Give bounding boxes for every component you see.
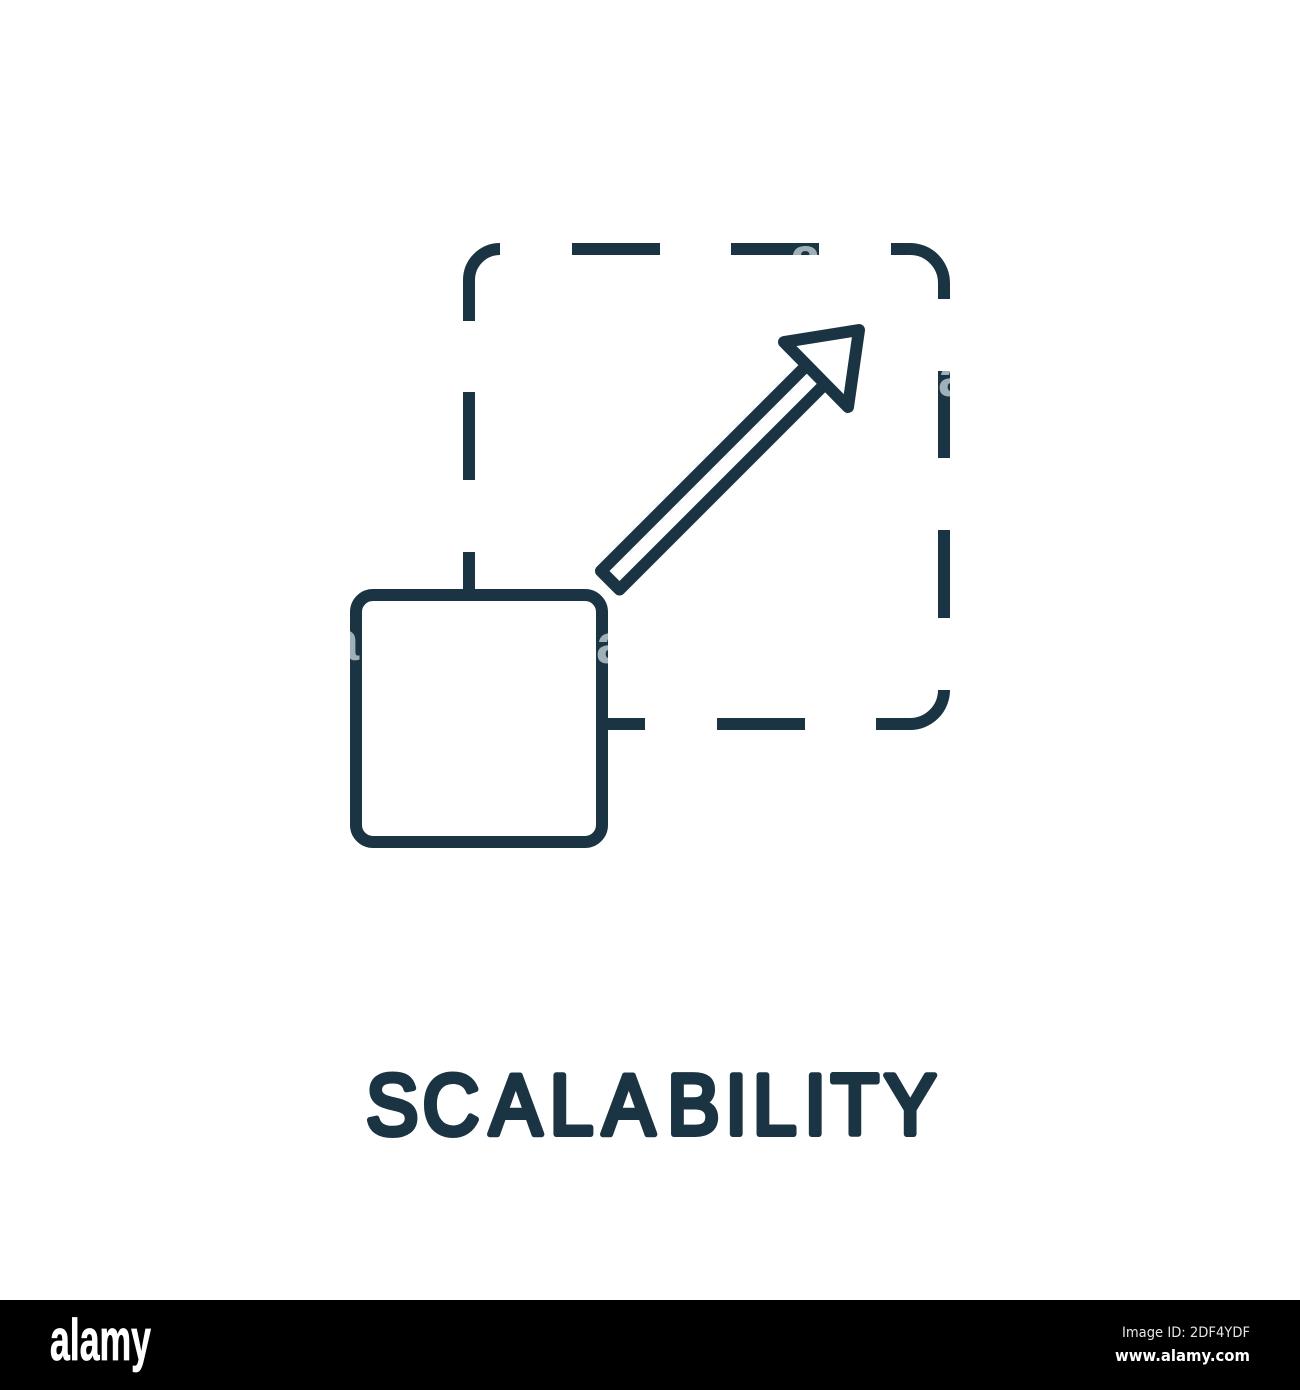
watermark fragments: a	[790, 225, 822, 288]
image id: Image ID: 2DF4YDF	[1122, 1325, 1250, 1341]
icon: scalability	[356, 249, 944, 842]
watermark fragments: a	[328, 609, 360, 672]
dashed target square	[469, 249, 944, 724]
footer bar	[0, 1300, 1300, 1390]
logo: alamy: alamy	[50, 1308, 151, 1373]
small solid square	[356, 595, 602, 842]
website: www.alamy.com	[1115, 1346, 1250, 1365]
arrow	[601, 330, 859, 590]
watermark fragments: a	[596, 612, 628, 675]
watermark fragments	[350, 246, 950, 664]
title: SCALABILITY	[366, 1058, 936, 1153]
watermark fragments: a	[938, 345, 970, 408]
